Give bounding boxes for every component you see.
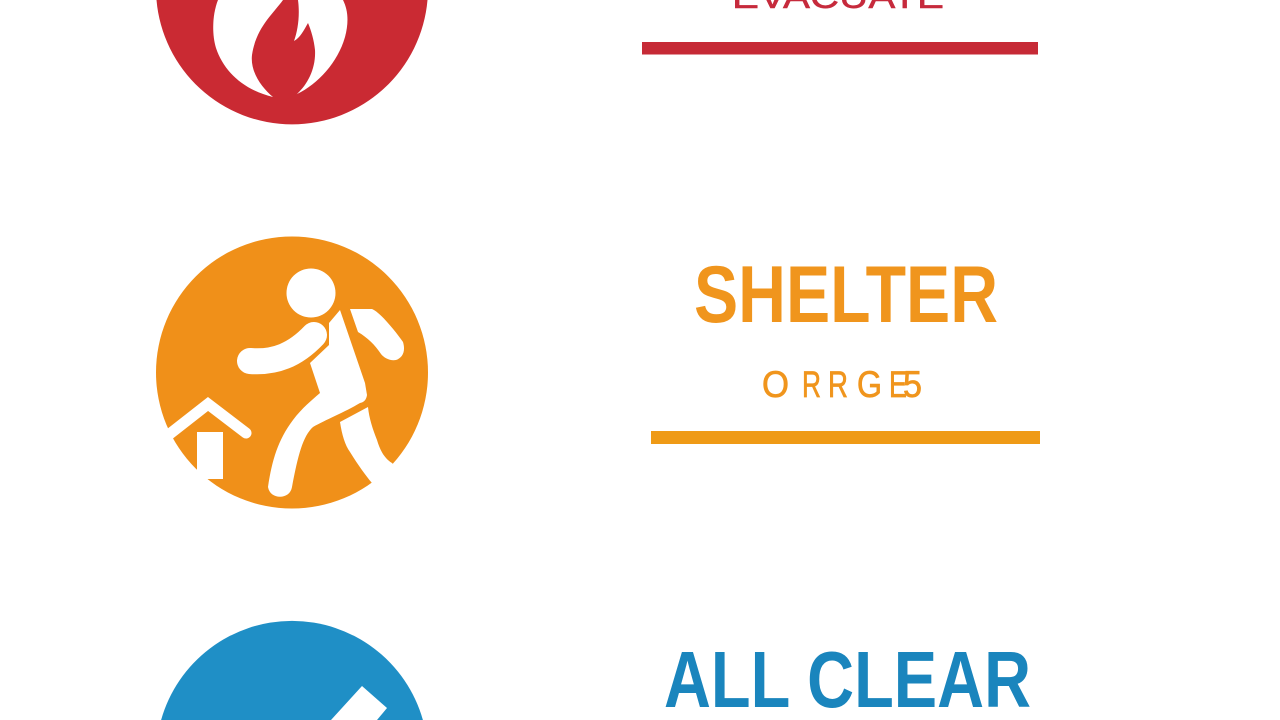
underline: shelter (651, 431, 1040, 444)
person: head (286, 268, 336, 318)
subheading: shelter: O (762, 364, 789, 405)
subheading: shelter: 5 (903, 364, 922, 405)
underline: evacuate (642, 42, 1038, 54)
person: back leg (340, 407, 405, 497)
icon: all clear check (161, 621, 423, 720)
person: torso and front leg (268, 310, 367, 497)
subheading: shelter: R (802, 364, 821, 405)
person: right arm (350, 309, 404, 360)
subheading: shelter: G (857, 364, 882, 405)
icon: shelter running person (156, 236, 428, 508)
subheading: shelter: E (889, 364, 907, 405)
heading: shelter: SHELTER (694, 250, 998, 340)
subheading: shelter: R (828, 364, 848, 405)
house: door (197, 432, 223, 479)
subheading: shelter (762, 364, 922, 405)
person: left arm (250, 335, 314, 361)
house: roof (162, 404, 246, 440)
icon: evacuate flame (156, 0, 428, 124)
